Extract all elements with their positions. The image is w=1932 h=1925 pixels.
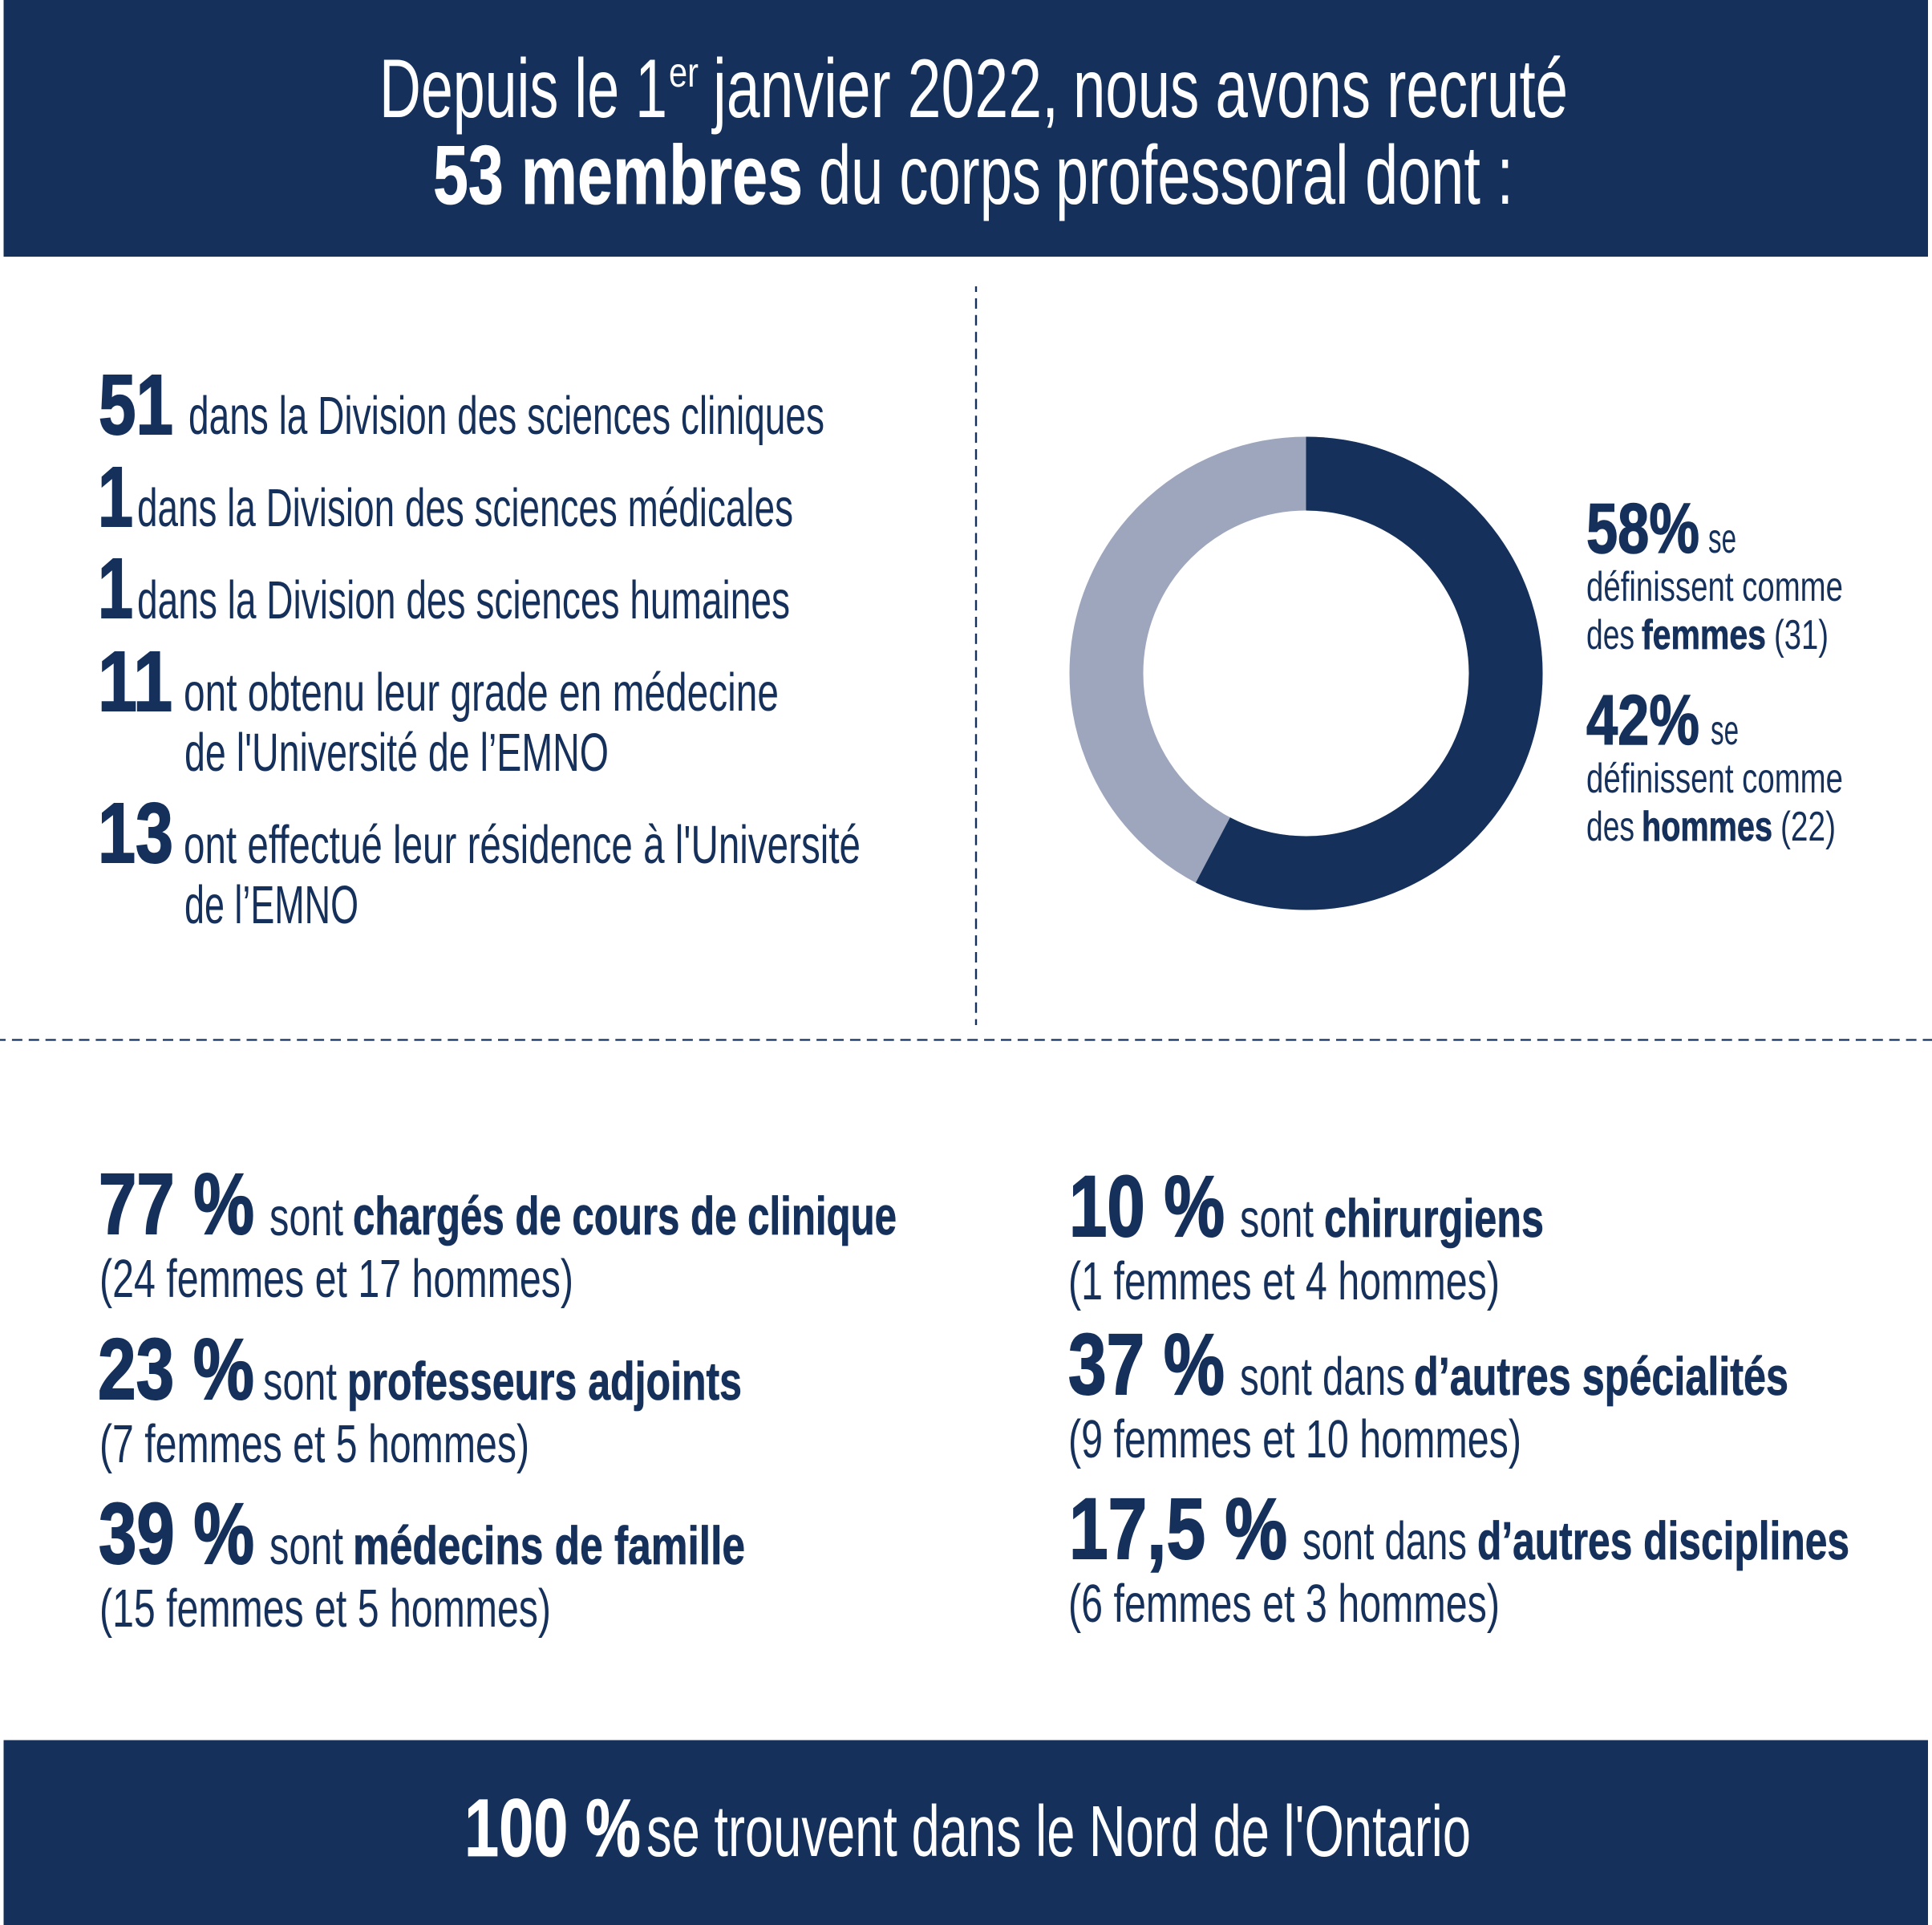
stat: 37 % autres spécialités: sont dans xyxy=(1240,1347,1405,1407)
legend: femmes: 58% xyxy=(1586,488,1699,568)
title line 1: er xyxy=(669,50,699,96)
stat: 23 % professeurs adjoints: (7 femmes et 5 hommes) xyxy=(99,1414,529,1474)
stat: 39 % médecins de famille: (15 femmes et 5 hommes) xyxy=(99,1578,551,1639)
stat: 39 % médecins de famille: médecins de famille xyxy=(353,1516,745,1576)
stat: 11 grade en médecine xyxy=(98,634,779,783)
panel: header banner xyxy=(3,0,1928,257)
donut chart xyxy=(1107,473,1506,873)
title line 2: professoral dont : xyxy=(1055,129,1513,222)
legend: femmes: femmes xyxy=(1642,612,1766,659)
legend: femmes xyxy=(1586,488,1843,659)
stat: 1 sciences médicales: 1 xyxy=(98,450,133,545)
stat: 13 résidence xyxy=(98,786,861,935)
stat: 39 % médecins de famille: 39 % xyxy=(99,1485,254,1582)
stat: 37 % autres spécialités xyxy=(1068,1315,1788,1469)
title line 2 xyxy=(433,129,1513,222)
stat: 13 résidence: de l’EMNO xyxy=(184,875,358,935)
stat: 1 sciences humaines: dans la Division des sciences humaines xyxy=(137,570,790,630)
stat: 23 % professeurs adjoints xyxy=(98,1320,742,1474)
stat: 1 sciences médicales xyxy=(98,450,793,545)
stat: 77 % chargés de cours: sont xyxy=(269,1187,343,1247)
stat: 23 % professeurs adjoints: sont xyxy=(263,1352,337,1412)
stat: 77 % chargés de cours: 77 % xyxy=(99,1155,254,1252)
panel: footer banner xyxy=(3,1741,1928,1925)
title line 2: 53 membres xyxy=(433,129,803,222)
stat: 13 résidence: 13 xyxy=(98,786,173,881)
stat: 10 % chirurgiens: (1 femmes et 4 hommes) xyxy=(1068,1251,1500,1311)
legend: femmes: se xyxy=(1708,516,1736,562)
stat: 37 % autres spécialités: (9 femmes et 10 hommes) xyxy=(1068,1409,1521,1469)
stat: 10 % chirurgiens: sont xyxy=(1240,1189,1314,1249)
stat: 1 sciences humaines xyxy=(98,541,790,636)
panel: roles right column xyxy=(1068,1157,1849,1634)
legend: hommes: hommes xyxy=(1642,804,1772,850)
stat: 77 % chargés de cours xyxy=(99,1155,897,1309)
stat: 51 sciences cliniques xyxy=(99,358,824,452)
legend: hommes: des xyxy=(1586,804,1634,850)
stat: 17,5 % autres disciplines: sont dans xyxy=(1302,1511,1467,1571)
stat: 13 résidence: ont effectué leur résidence à l'Université xyxy=(184,815,861,875)
stat: 39 % médecins de famille xyxy=(99,1485,745,1639)
title line 2: du corps xyxy=(819,129,1041,222)
panel: division counts xyxy=(98,358,861,935)
legend: femmes: des xyxy=(1586,612,1634,659)
stat: 77 % chargés de cours: chargés de cours de clinique xyxy=(353,1186,897,1246)
stat: 10 % chirurgiens: chirurgiens xyxy=(1324,1189,1544,1249)
stat: 11 grade en médecine: ont obtenu leur grade en médecine xyxy=(184,663,779,723)
title line 1 xyxy=(379,43,1568,136)
legend: femmes: définissent comme xyxy=(1586,564,1843,610)
stat: 17,5 % autres disciplines xyxy=(1068,1480,1849,1634)
legend: hommes: définissent comme xyxy=(1586,756,1843,802)
stat: 11 grade en médecine: de l'Université de l’EMNO xyxy=(184,723,609,783)
legend: hommes: 42% xyxy=(1586,680,1699,760)
legend: hommes xyxy=(1586,680,1843,850)
stat: 1 sciences humaines: 1 xyxy=(98,541,133,636)
legend: hommes: se xyxy=(1711,707,1739,754)
panel: roles left column xyxy=(98,1155,897,1639)
legend: hommes: (22) xyxy=(1780,804,1836,850)
stat: 37 % autres spécialités: 37 % xyxy=(1068,1315,1225,1412)
footer statement: se trouvent dans le Nord de l'Ontario xyxy=(646,1792,1471,1872)
title line 1: Depuis le 1 xyxy=(379,43,667,136)
legend: femmes: (31) xyxy=(1774,612,1829,659)
stat: 17,5 % autres disciplines: (6 femmes et 3 hommes) xyxy=(1068,1574,1500,1634)
stat: 23 % professeurs adjoints: 23 % xyxy=(98,1320,254,1417)
stat: 37 % autres spécialités: d’autres spécialités xyxy=(1414,1347,1788,1407)
title line 1: janvier 2022, xyxy=(711,43,1059,136)
footer statement xyxy=(464,1782,1471,1874)
stat: 51 sciences cliniques: 51 xyxy=(99,358,173,452)
stat: 23 % professeurs adjoints: professeurs adjoints xyxy=(347,1352,742,1412)
stat: 11 grade en médecine: 11 xyxy=(98,634,172,729)
stat: 39 % médecins de famille: sont xyxy=(269,1516,343,1576)
stat: 10 % chirurgiens xyxy=(1068,1157,1544,1311)
stat: 1 sciences médicales: dans la Division des sciences médicales xyxy=(137,478,793,538)
footer statement: 100 % xyxy=(464,1782,641,1874)
stat: 10 % chirurgiens: 10 % xyxy=(1069,1157,1225,1254)
stat: 51 sciences cliniques: dans la Division des sciences cliniques xyxy=(188,386,824,446)
stat: 77 % chargés de cours: (24 femmes et 17 hommes) xyxy=(99,1249,573,1309)
panel: gender split xyxy=(1107,473,1843,873)
stat: 17,5 % autres disciplines: 17,5 % xyxy=(1069,1480,1287,1577)
title line 1: nous avons recruté xyxy=(1073,43,1568,136)
